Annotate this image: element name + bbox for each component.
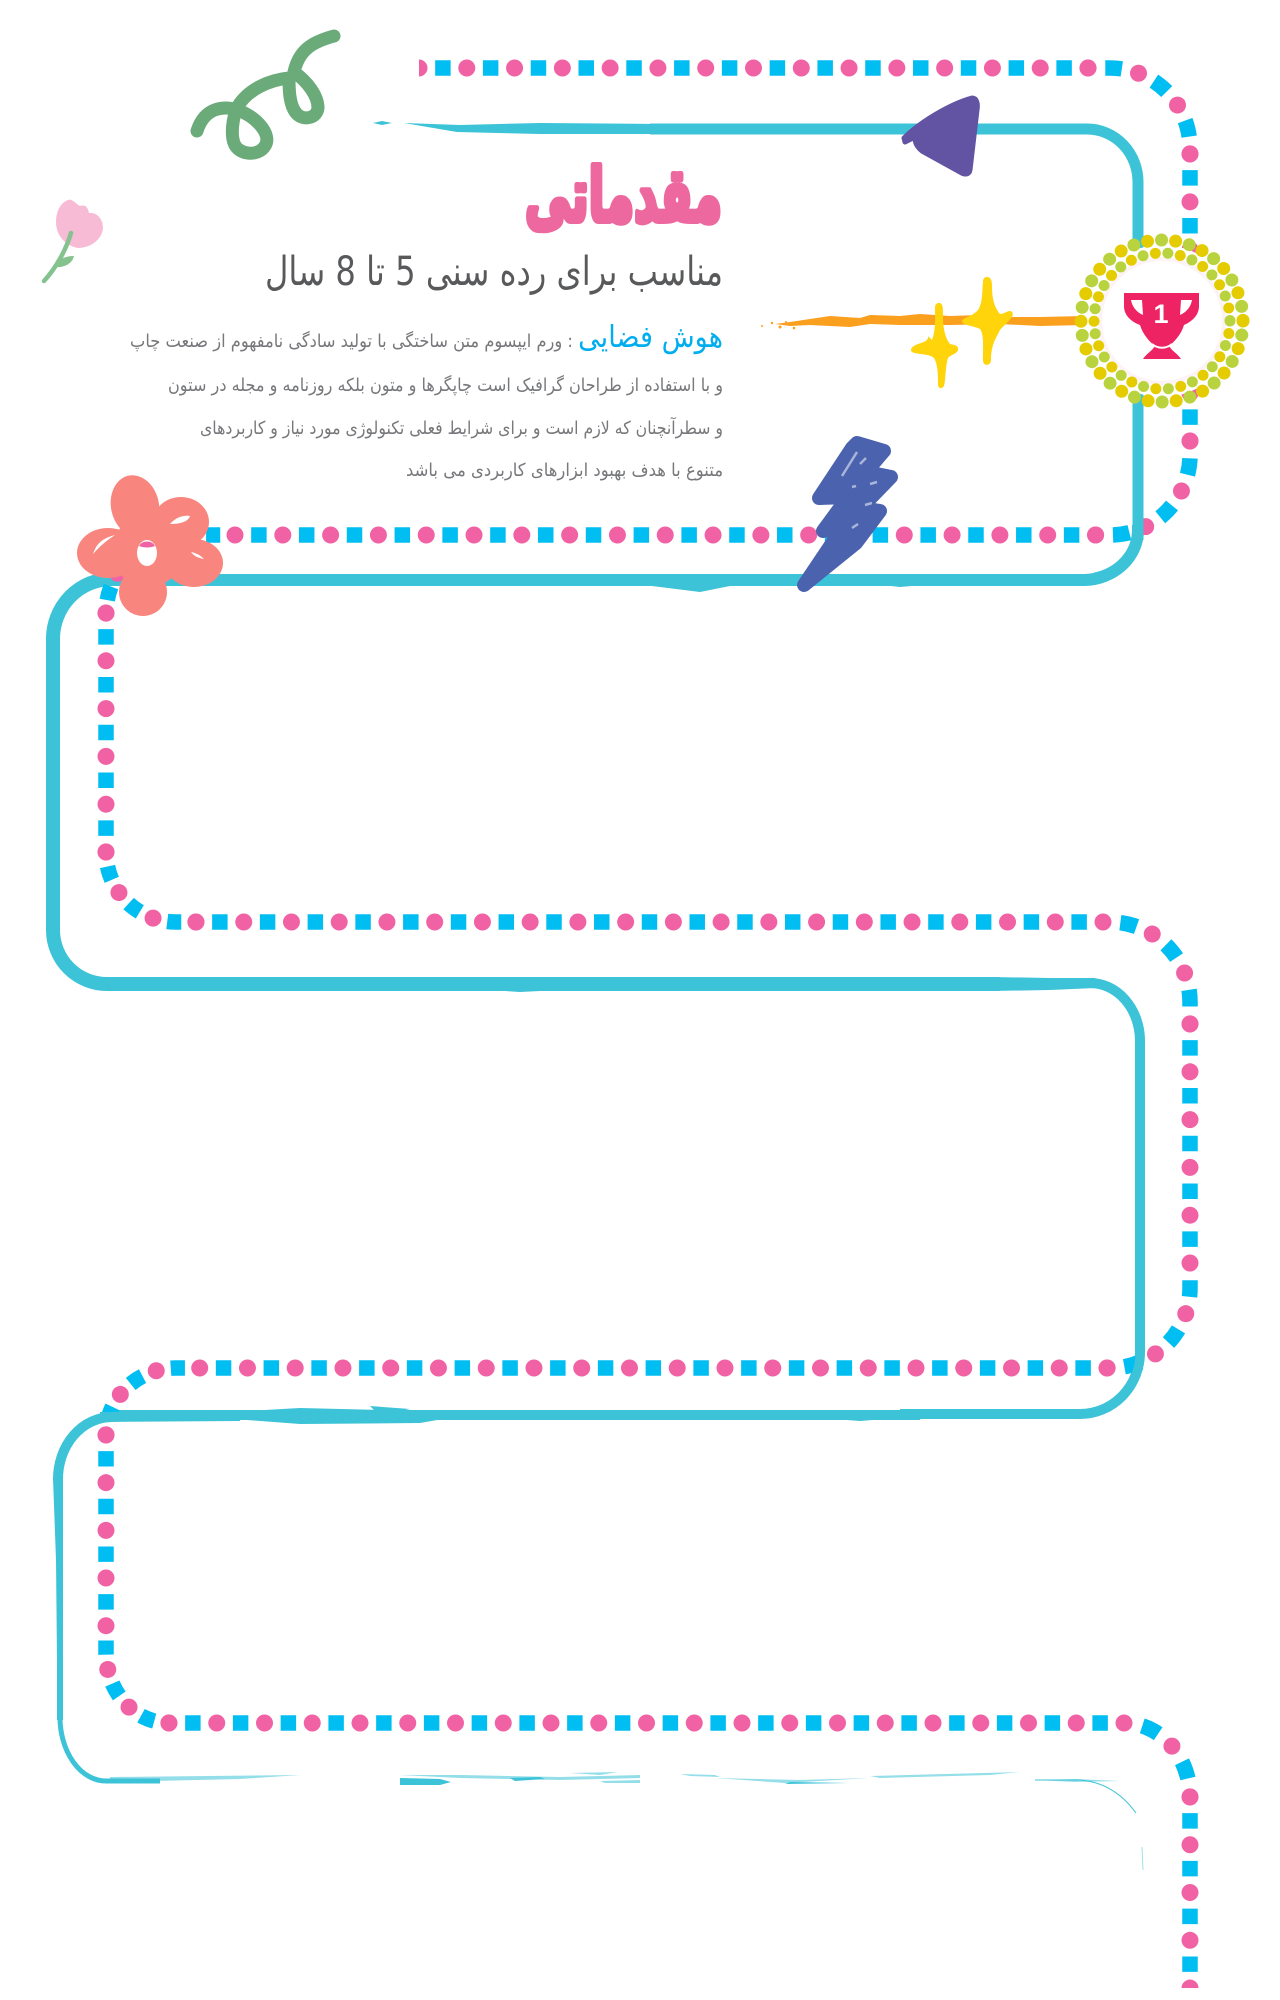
icon: green squiggle <box>197 36 334 153</box>
subtitle: مناسب برای رده سنی 5 تا 8 سال <box>265 249 723 295</box>
title: مقدماتی <box>525 153 722 239</box>
icon: trophy <box>1124 293 1199 359</box>
trophy badge <box>1081 240 1243 402</box>
orange brush stroke <box>761 314 1085 329</box>
icon: blue lightning bolt <box>804 443 891 585</box>
body line 3: و سطرآنچنان که لازم است و برای شرایط فعلی تکنولوژی مورد نیاز و کاربردهای <box>200 416 723 439</box>
teal hand-drawn winding line <box>53 121 1143 1870</box>
text block: description <box>130 320 723 481</box>
icon: pink tulip <box>44 200 103 281</box>
icon: coral flower <box>77 471 223 616</box>
teal line redrawn over dotted path at crossings <box>100 400 1140 1422</box>
faded sketch fragments on bottom line <box>110 1772 1143 1870</box>
icon: trophy: 1 <box>1153 299 1169 329</box>
body line 4: متنوع با هدف بهبود ابزارهای کاربردی می باشد <box>406 460 723 481</box>
icon: purple triangle <box>904 98 977 174</box>
body line 2: و با استفاده از طراحان گرافیک است چاپگرها و متون بلکه روزنامه و مجله در ستون <box>168 374 723 396</box>
icon: yellow sparkles <box>911 277 1013 388</box>
body line 1: هوش فضایی : ورم ایپسوم متن ساختگی با تولید سادگی نامفهوم از صنعت چاپ <box>130 320 723 355</box>
